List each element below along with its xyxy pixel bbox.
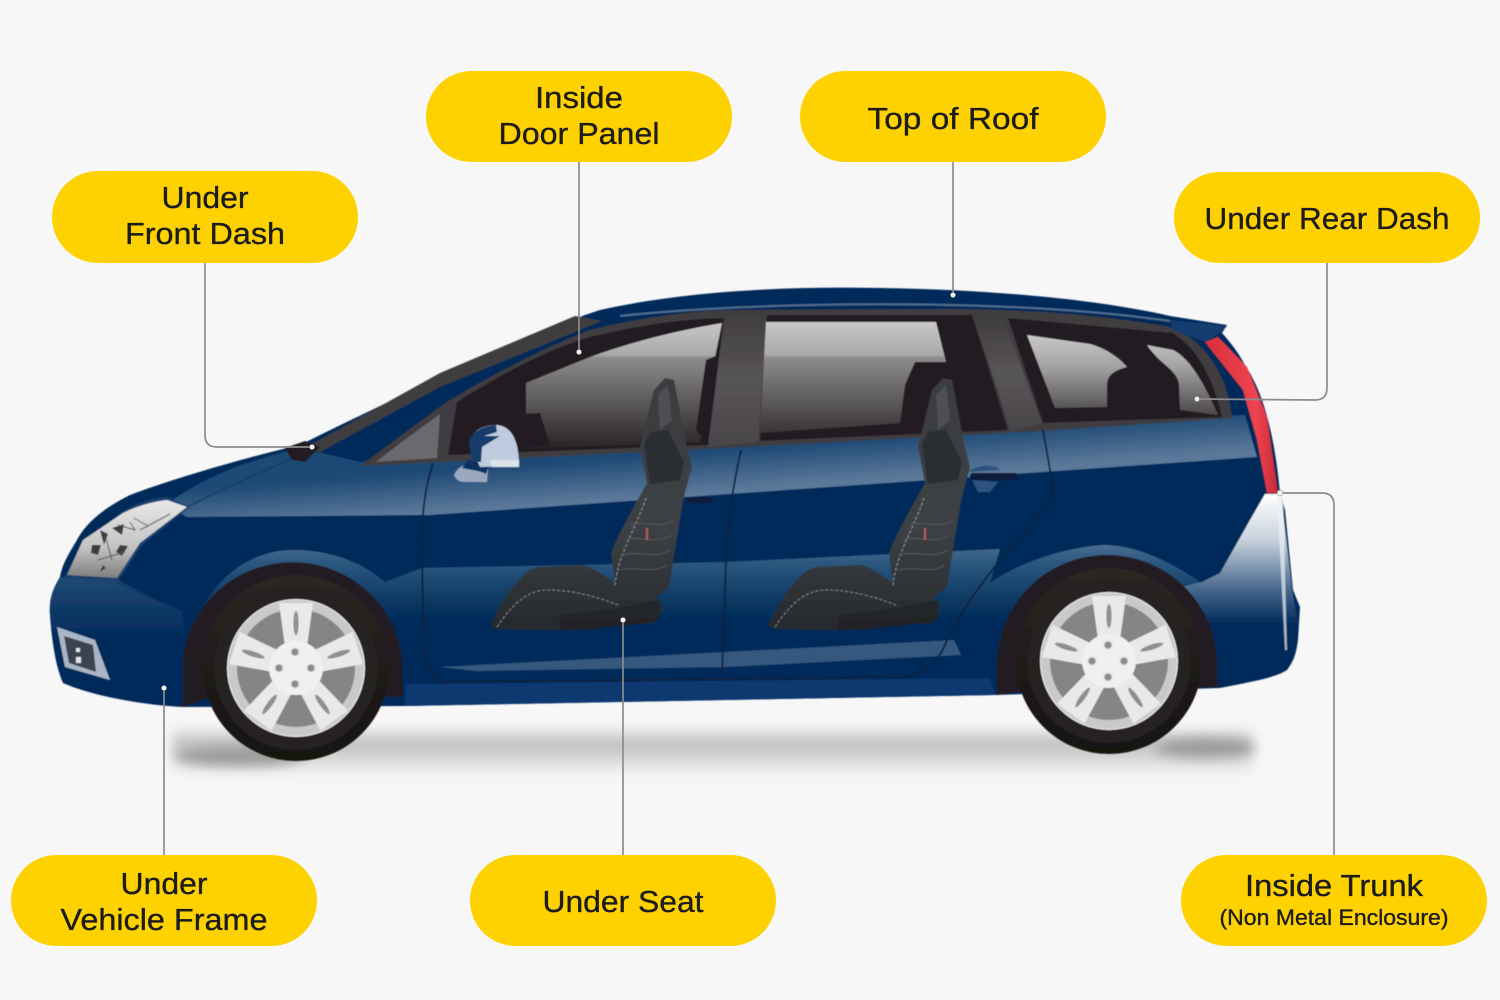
rear glass right [1147, 345, 1218, 415]
front fender crease [117, 583, 180, 610]
label: inside door panel: Inside [535, 80, 623, 115]
rear window [1008, 318, 1222, 423]
front seat [490, 378, 692, 630]
rear wheel [1016, 568, 1202, 754]
leader lines [164, 162, 1334, 855]
wiper [285, 441, 320, 462]
front glass [526, 323, 722, 448]
label: under vehicle frame: Under [120, 866, 208, 901]
label: under vehicle frame: Vehicle Frame [60, 902, 268, 937]
label: under seat [470, 855, 776, 946]
c pillar [973, 315, 1042, 431]
middle window [760, 315, 1008, 441]
spoiler [1170, 320, 1227, 342]
label: under vehicle frame [11, 855, 317, 946]
label: top of roof: Top of Roof [868, 101, 1039, 136]
windshield pillar strip [305, 316, 602, 452]
car illustration [40, 288, 1300, 761]
window frame [360, 309, 1232, 466]
hood crease [187, 458, 292, 507]
label: under rear dash [1174, 172, 1480, 263]
lower door and arch highlight [202, 544, 1200, 620]
b pillar [708, 310, 767, 447]
rear corner highlight [1184, 493, 1297, 623]
fog lamp [57, 627, 110, 680]
label: inside door panel: Door Panel [498, 116, 660, 151]
roof highlight line [620, 304, 1170, 321]
front wheel arch [183, 562, 403, 707]
label: under rear dash: Under Rear Dash [1204, 201, 1450, 236]
tail light [1205, 337, 1278, 493]
location dots [161, 292, 1283, 691]
rear seat [768, 378, 970, 630]
front bumper reflection [40, 577, 186, 640]
front window [448, 318, 725, 455]
label: inside trunk [1181, 855, 1487, 946]
label: inside trunk: Inside Trunk [1245, 868, 1424, 903]
lower door stripe [440, 640, 961, 671]
label: top of roof [800, 71, 1106, 162]
rear white edge [1277, 493, 1287, 650]
side sill [405, 678, 996, 707]
label: under front dash [52, 171, 358, 263]
headlight [64, 497, 190, 581]
door shut lines [422, 430, 1053, 682]
rear wheel arch [997, 555, 1218, 695]
rear glass left [1027, 335, 1127, 408]
label: under front dash: Under [162, 180, 248, 215]
front seat silhouette [508, 355, 718, 450]
label: inside trunk: (Non Metal Enclosure) [1220, 905, 1448, 930]
front wheel [203, 575, 389, 761]
side quarter window [376, 414, 440, 462]
car body [50, 288, 1300, 707]
label: inside door panel [426, 71, 732, 162]
label: under front dash: Front Dash [125, 216, 285, 251]
label: under seat: Under Seat [542, 884, 704, 919]
door handles [686, 466, 1018, 503]
upper belt and hood highlight [165, 415, 1257, 517]
ground shadow [172, 726, 1255, 776]
body shading [40, 415, 1298, 707]
wing mirror [454, 425, 519, 482]
middle glass [760, 322, 946, 433]
